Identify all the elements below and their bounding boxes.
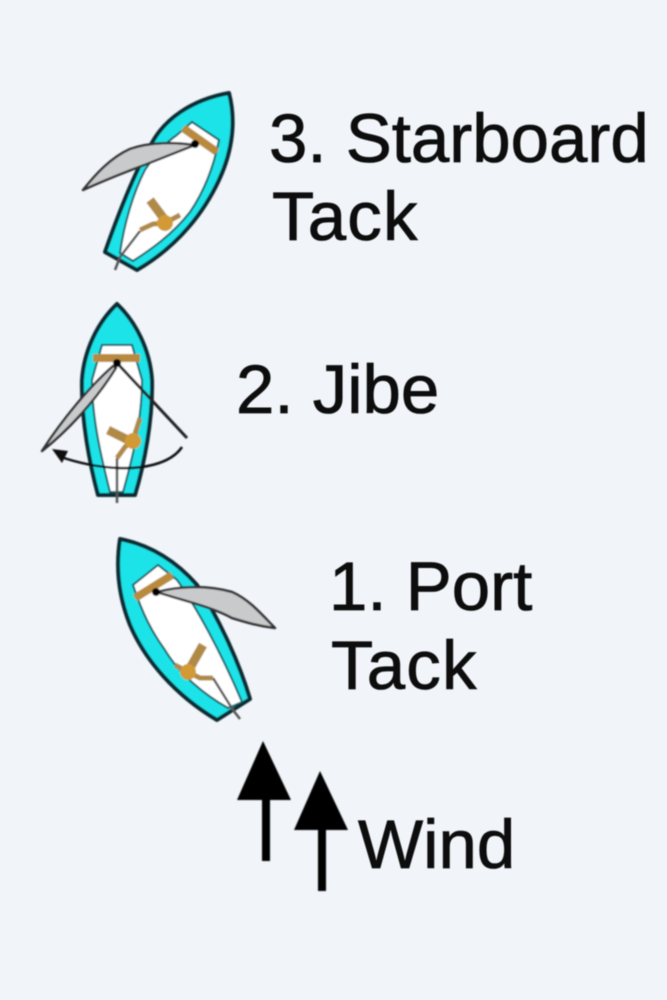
label: 3. Starboard Tack [269,100,649,255]
label: 3. Starboard Tack: Tack [272,178,419,255]
label: 1. Port Tack: Tack [331,627,478,704]
label: Wind: Wind [358,806,515,883]
label: 2. Jibe: 2. Jibe [236,351,439,428]
boat 3: starboard tack [83,93,233,270]
arrows: wind direction [237,741,348,891]
label: 1. Port Tack [329,548,532,704]
label: 3. Starboard Tack: 3. Starboard [269,100,649,177]
boat 1: port tack [118,539,275,720]
boat 2: jibe [42,304,187,503]
label: 1. Port Tack: 1. Port [329,548,532,625]
